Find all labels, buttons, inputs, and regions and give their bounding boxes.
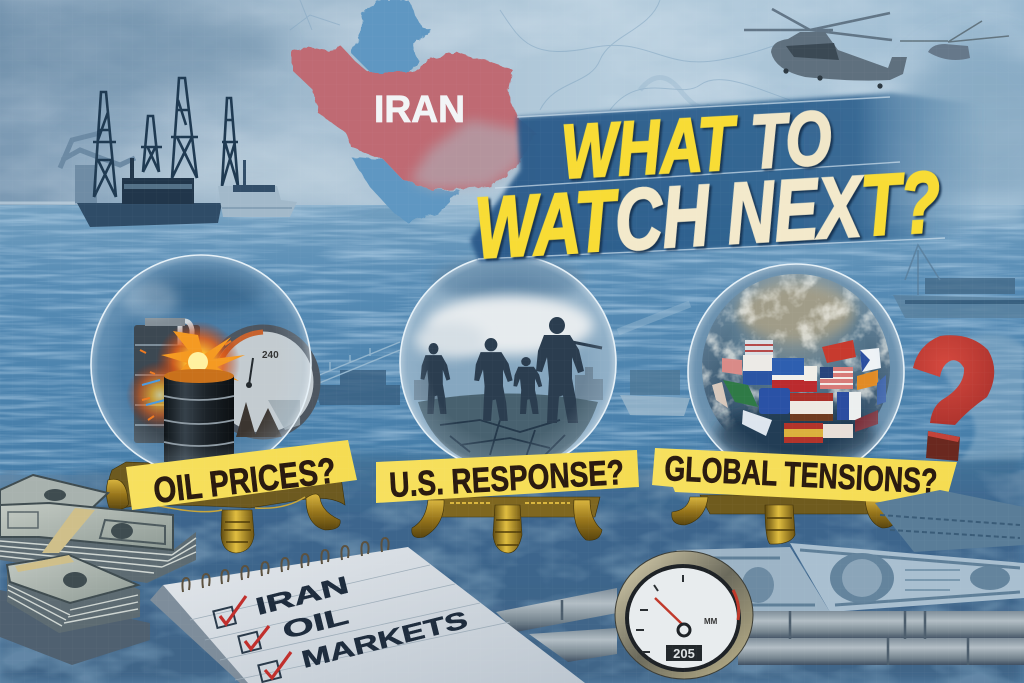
soldiers bbox=[420, 317, 602, 423]
checklist item: Iran bbox=[213, 572, 352, 628]
notebook spiral bbox=[182, 538, 389, 592]
distant ship right bbox=[893, 245, 1024, 318]
pressure gauge in globe bbox=[209, 328, 317, 437]
stand: oil prices bbox=[106, 462, 345, 553]
map: Iran bbox=[292, 47, 536, 190]
banner and title bbox=[470, 93, 985, 277]
map: Caspian Sea bbox=[351, 0, 432, 73]
label: oil prices: OIL PRICES? bbox=[151, 449, 338, 511]
globe body bbox=[91, 255, 311, 475]
gauge readout: 205 bbox=[673, 646, 695, 661]
pressure gauge in globe: 240 bbox=[262, 350, 279, 361]
pressure gauge foreground: MM bbox=[704, 617, 718, 626]
fuel drum bbox=[134, 318, 200, 443]
checklist item: Markets: MARKETS bbox=[299, 606, 470, 674]
title line 2: WATCH NEXT? bbox=[473, 154, 943, 277]
helicopter: small bbox=[900, 21, 1009, 60]
distant ships and bridge centre bbox=[312, 304, 690, 416]
stack: front bbox=[7, 555, 140, 633]
explosion bbox=[126, 321, 245, 429]
icon: red question mark bbox=[913, 335, 994, 461]
scattered dollar bills right bbox=[676, 490, 1024, 614]
label: global tensions: GLOBAL TENSIONS? bbox=[664, 449, 938, 501]
label: U.S. response: U.S. RESPONSE? bbox=[388, 453, 625, 505]
title line 1: WHAT TO bbox=[559, 96, 834, 195]
map label: Iran: IRAN bbox=[374, 89, 465, 131]
earth bbox=[702, 274, 890, 465]
flags band bbox=[712, 340, 886, 443]
stand: global tensions bbox=[672, 495, 896, 544]
helicopter: large bbox=[744, 9, 907, 89]
panel: oil prices globe bbox=[91, 255, 357, 553]
checklist item: Oil: OIL bbox=[280, 602, 351, 645]
stack: base bbox=[0, 590, 150, 665]
pipes bbox=[496, 588, 1024, 665]
cash stacks bbox=[0, 475, 196, 665]
stack: rear bbox=[0, 475, 196, 583]
checklist item: Markets bbox=[258, 606, 470, 682]
oil rigs and ships bbox=[0, 78, 297, 227]
oil barrel bbox=[164, 369, 234, 462]
stand: U.S. response bbox=[412, 497, 602, 553]
globe body bbox=[400, 255, 616, 471]
checklist item: Oil bbox=[238, 602, 351, 653]
panel: U.S. response globe bbox=[376, 255, 639, 553]
globe body bbox=[688, 264, 904, 480]
panel: global tensions globe bbox=[652, 264, 957, 544]
map: Persian Gulf bbox=[351, 157, 460, 223]
checklist item: Iran: IRAN bbox=[253, 572, 352, 621]
faint map and cash right background bbox=[930, 334, 1024, 460]
pressure gauge foreground bbox=[615, 551, 753, 679]
battlefield sky bbox=[414, 258, 603, 470]
notebook checklist bbox=[150, 538, 585, 683]
faint background map lines bbox=[290, 0, 830, 110]
